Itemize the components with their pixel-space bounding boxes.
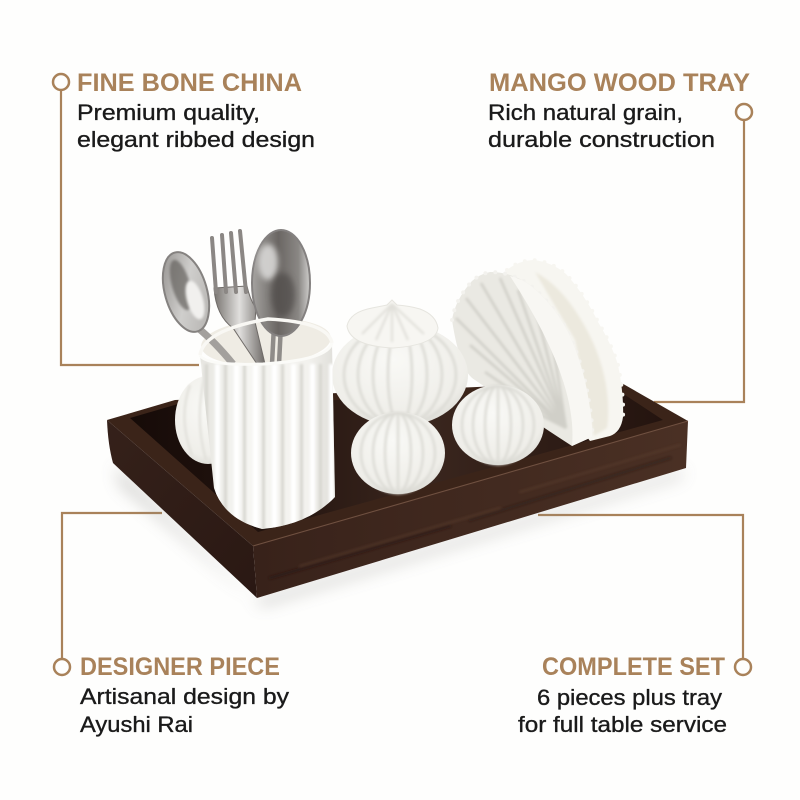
body: mango wood tray: Rich natural grain, <box>488 100 683 125</box>
body: fine bone china: elegant ribbed design <box>77 127 315 152</box>
ribbed cup <box>198 317 335 529</box>
tray well <box>130 393 663 532</box>
tray shadow <box>115 465 686 606</box>
connector line: fine bone china <box>61 90 199 365</box>
salt shaker left <box>351 412 445 494</box>
body: mango wood tray: durable construction <box>488 127 715 152</box>
body: complete set: for full table service <box>518 712 727 737</box>
body: complete set <box>518 685 727 737</box>
body: fine bone china: Premium quality, <box>77 100 260 125</box>
right spoon <box>252 230 310 364</box>
text block: mango wood tray <box>488 69 750 152</box>
heading: complete set: COMPLETE SET <box>542 653 725 681</box>
fork <box>212 231 265 364</box>
marker: fine bone china <box>53 74 69 90</box>
plate rim band <box>510 276 592 446</box>
tray front side <box>253 421 688 598</box>
body: fine bone china <box>77 100 315 152</box>
text block: designer piece <box>80 653 290 737</box>
text block: complete set <box>518 653 727 737</box>
body: designer piece: Ayushi Rai <box>80 712 193 737</box>
pot lid <box>347 300 438 348</box>
connector line: complete set <box>538 515 743 659</box>
body: designer piece: Artisanal design by <box>80 684 290 709</box>
heading: designer piece: DESIGNER PIECE <box>80 653 280 681</box>
text block: fine bone china <box>77 69 315 152</box>
wood grain <box>270 445 680 578</box>
product illustration <box>107 230 688 606</box>
tray left side <box>107 420 257 598</box>
salt shaker right <box>452 385 544 465</box>
left spoon <box>155 247 233 364</box>
shell plate back <box>500 260 623 441</box>
cup interior <box>200 315 332 369</box>
pot body <box>332 324 468 426</box>
wooden tray <box>107 381 688 598</box>
sugar pot <box>332 300 468 426</box>
body: mango wood tray <box>488 100 715 152</box>
tray edge highlight <box>253 421 688 546</box>
back pot behind cup <box>175 375 241 464</box>
heading: mango wood tray: MANGO WOOD TRAY <box>489 69 750 97</box>
connector line: mango wood tray <box>654 120 744 402</box>
heading: fine bone china: FINE BONE CHINA <box>77 69 302 97</box>
body: designer piece <box>80 684 290 737</box>
shell plate front <box>452 272 592 446</box>
marker: designer piece <box>54 659 70 675</box>
tray rim top <box>107 381 688 546</box>
marker: complete set <box>735 659 751 675</box>
marker: mango wood tray <box>736 104 752 120</box>
body: complete set: 6 pieces plus tray <box>537 685 723 710</box>
plate inner cream face <box>535 272 608 436</box>
connector line: designer piece <box>62 513 162 659</box>
